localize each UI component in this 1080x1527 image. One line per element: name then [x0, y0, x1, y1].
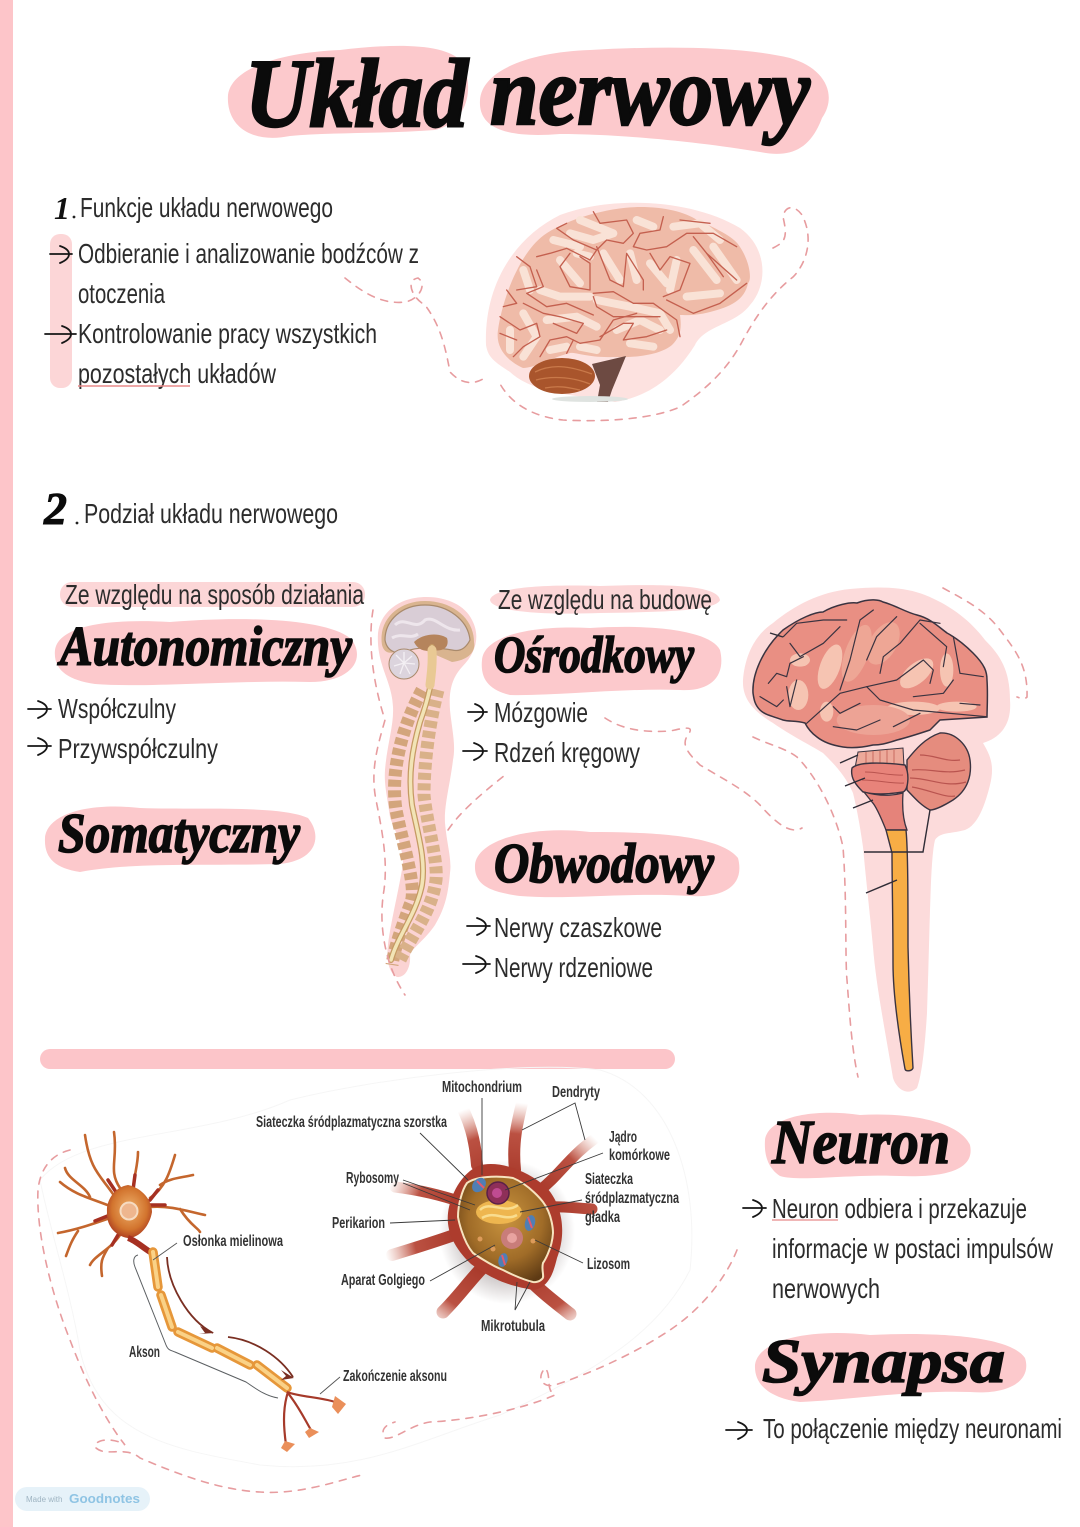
section 1: functions of the nervous system [45, 190, 419, 389]
label: myelin sheath: Osłonka mielinowa [183, 1233, 283, 1250]
column: by structure: Nerwy rdzeniowe [494, 952, 653, 983]
illustration: brain with brainstem and spinal cord [743, 587, 1010, 1092]
dashed connector: spine [371, 610, 505, 995]
section 1: functions of the nervous system: otoczenia [78, 278, 165, 309]
label: smooth endoplasmic reticulum [585, 1171, 679, 1226]
label: axon terminal: Zakończenie aksonu [343, 1368, 447, 1385]
column: by mode of action [28, 579, 365, 872]
title: Układ [245, 40, 470, 148]
label: ribosomes: Rybosomy [346, 1170, 399, 1187]
label: perikaryon: Perikarion [332, 1215, 385, 1232]
left page stripe [0, 0, 13, 1527]
heading: Somatyczny: Somatyczny [58, 803, 301, 865]
badge: Made with Goodnotes: Made with [26, 1495, 62, 1504]
label: mitochondrion: Mitochondrium [442, 1079, 522, 1096]
heading: Synapsa: Synapsa [762, 1328, 1005, 1396]
badge: Made with Goodnotes [15, 1487, 150, 1511]
heading: Obwodowy: Obwodowy [494, 833, 715, 895]
section 1: functions of the nervous system: Funkcje układu nerwowego [80, 192, 333, 223]
title [228, 38, 829, 154]
label: cell nucleus [609, 1129, 670, 1164]
dashed connector: neuron sticker [38, 1150, 737, 1492]
section 1: functions of the nervous system: pozostałych układów [78, 358, 277, 389]
section 2 heading: 2 [43, 483, 67, 534]
section 2 heading: Podział układu nerwowego [84, 498, 338, 529]
illustration: neuron cell body cross-section [256, 1079, 679, 1335]
label: cell nucleus: komórkowe [609, 1147, 670, 1164]
section 2 heading [43, 483, 338, 534]
section 1: functions of the nervous system: Kontrolowanie pracy wszystkich [78, 318, 377, 349]
column: by structure: Rdzeń kręgowy [494, 737, 640, 768]
illustration: brain and spinal cord [378, 597, 476, 977]
column: by mode of action: Ze względu na sposób działania [65, 579, 364, 610]
column: by structure: Ze względu na budowę [498, 584, 712, 615]
label: lysosome: Lizosom [587, 1256, 630, 1273]
illustration: whole neuron [58, 1132, 447, 1452]
heading: Autonomiczny: Autonomiczny [57, 616, 353, 678]
section 1: functions of the nervous system: Odbieranie i analizowanie bodźców z [78, 238, 419, 269]
title: nerwowy [490, 38, 810, 146]
label: smooth endoplasmic reticulum: Siateczka [585, 1171, 633, 1188]
column: by structure: Mózgowie [494, 697, 588, 728]
label: microtubule: Mikrotubula [481, 1318, 545, 1335]
label: cell nucleus: Jądro [609, 1129, 637, 1146]
label: axon: Akson [129, 1344, 160, 1361]
label: dendrites: Dendryty [552, 1084, 600, 1101]
column: by mode of action: Przywspółczulny [58, 733, 218, 764]
divider bar [40, 1049, 675, 1069]
column: by mode of action: Współczulny [58, 693, 176, 724]
column: by structure: Nerwy czaszkowe [494, 912, 662, 943]
badge: Made with Goodnotes: Goodnotes [69, 1491, 140, 1506]
label: smooth endoplasmic reticulum: śródplazmatyczna [585, 1190, 679, 1207]
text block: neuron description: nerwowych [772, 1273, 880, 1304]
dashed connector: top brain [345, 208, 808, 421]
label: smooth endoplasmic reticulum: gładka [585, 1209, 620, 1226]
text block: neuron description [743, 1193, 1054, 1304]
section 1: functions of the nervous system: 1 [54, 190, 70, 226]
photo: human brain [486, 203, 762, 402]
label: Golgi apparatus: Aparat Golgiego [341, 1272, 425, 1289]
heading: Ośrodkowy: Ośrodkowy [494, 627, 695, 684]
label: rough endoplasmic reticulum: Siateczka śródplazmatyczna szorstka [256, 1114, 447, 1131]
column: by structure [463, 584, 739, 983]
faint sticker outline [40, 1067, 692, 1467]
heading: Neuron: Neuron [771, 1109, 950, 1177]
dashed connector: brainstem [605, 588, 1027, 1077]
